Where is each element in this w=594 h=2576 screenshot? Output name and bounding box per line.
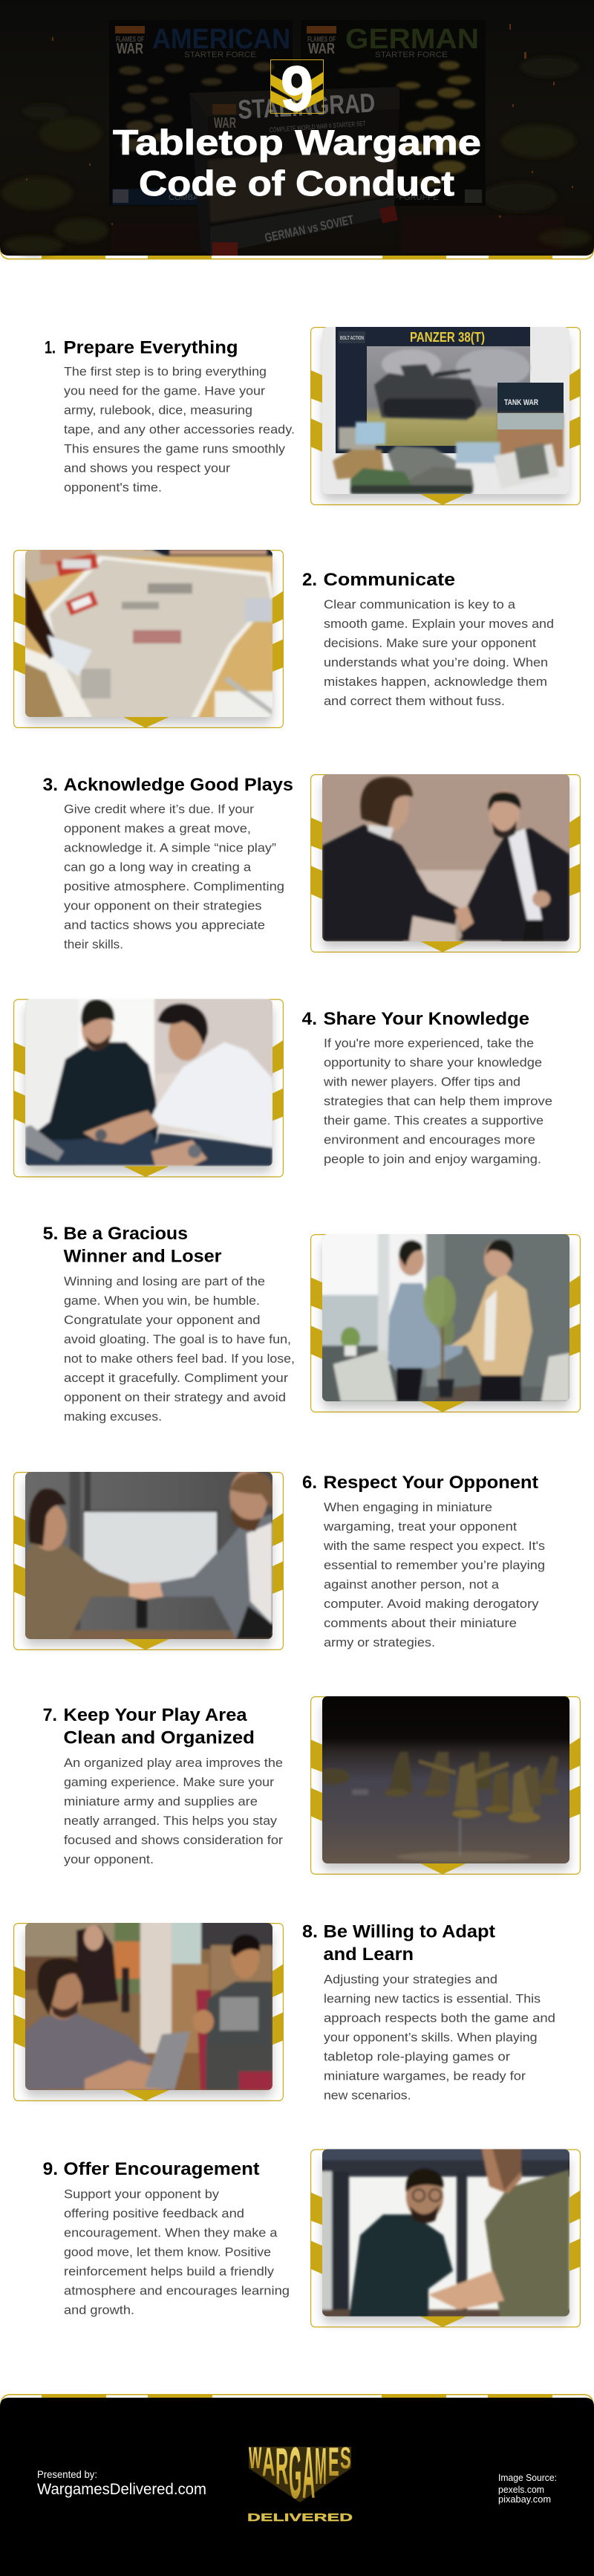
body text 5 [64, 1274, 295, 1424]
body text 6: army or strategies. [324, 1635, 435, 1649]
body text 4: strategies that can help them improve [324, 1094, 552, 1109]
photo: handshake in an office [319, 1230, 575, 1405]
image card 6 [13, 1468, 284, 1649]
panel: 4 share your knowledge [13, 996, 552, 1177]
body text 2: understands what you’re doing. When [324, 655, 548, 669]
panel: 3 acknowledge good plays [43, 774, 581, 953]
body text 7: miniature army and supplies are [64, 1794, 258, 1808]
header dark background [0, 0, 594, 256]
body text 3: their skills. [64, 938, 123, 952]
body text 1: opponent's time. [64, 481, 162, 495]
body text 7: gaming experience. Make sure your [64, 1775, 274, 1789]
German starter force box: GERMAN [345, 24, 479, 55]
heading 7: 7. [43, 1705, 57, 1725]
American starter force box: WAR [117, 41, 143, 57]
photo: friends chatting in a cafe [22, 1919, 275, 2094]
body text 4: opportunity to share your knowledge [324, 1056, 542, 1070]
body text 6: When engaging in miniature [324, 1500, 492, 1514]
logo: Wargames Delivered: M [315, 2437, 327, 2495]
body text 1: and shows you respect your [64, 461, 230, 476]
logo: Wargames Delivered: R [275, 2438, 288, 2496]
photo: businessmen shaking hands [322, 774, 569, 944]
body text 7: An organized play area improves the [64, 1756, 283, 1770]
body text 2: mistakes happen, acknowledge them [324, 675, 547, 689]
body text 6: with the same respect you expect. It's [323, 1539, 545, 1553]
body text 5: avoid gloating. The goal is to have fun, [64, 1332, 291, 1346]
body text 3: Give credit where it’s due. If your [64, 802, 254, 817]
hero background tanks and sparks [1, 24, 591, 254]
body text 3: positive atmosphere. Complimenting [64, 880, 284, 894]
image card 5 [310, 1230, 581, 1412]
body text 9: encouragement. When they make a [64, 2225, 278, 2239]
logo: Wargames Delivered: A [262, 2439, 275, 2485]
header banner [0, 0, 594, 259]
panel: 1 prepare everything [45, 327, 581, 505]
body text 9: offering positive feedback and [64, 2206, 244, 2220]
photo: Panzer 38(T) box set: BOLT ACTION [340, 336, 364, 341]
body text 5: not to make others feel bad. If you lose, [64, 1352, 295, 1366]
image card 8 [13, 1919, 284, 2101]
photo: man shaking hands by a window [319, 2146, 575, 2320]
logo: Wargames Delivered: DELIVERED [247, 2511, 353, 2524]
heading 8: Be Willing to Adapt [324, 1921, 495, 1942]
body text 2: Clear communication is key to a [324, 597, 516, 611]
body text 3: can go a long way in creating a [64, 860, 252, 875]
body text 8: your opponent’s skills. When playing [324, 2031, 538, 2045]
body text 3 [64, 802, 284, 952]
heading 6: Respect Your Opponent [324, 1473, 538, 1493]
heading 7: Clean and Organized [64, 1728, 255, 1748]
heading 8 [302, 1921, 495, 1965]
German starter force box: WAR [308, 41, 335, 57]
body text 2: and correct them without fuss. [324, 694, 505, 708]
image card 7 [310, 1696, 581, 1874]
heading 1: Prepare Everything [64, 337, 238, 358]
body text 3: and tactics shows you appreciate [64, 918, 265, 932]
body text 8: tabletop role-playing games or [324, 2050, 510, 2064]
heading 7: Keep Your Play Area [64, 1705, 247, 1725]
body text 4 [323, 1036, 552, 1167]
logo: Wargames Delivered: G [289, 2433, 301, 2514]
body text 6: against another person, not a [324, 1577, 500, 1592]
heading 2: Communicate [324, 570, 455, 590]
heading 6: 6. [302, 1473, 317, 1493]
body text 4: people to join and enjoy wargaming. [324, 1152, 541, 1167]
logo: Wargames Delivered: E [328, 2439, 339, 2485]
photo: two men with a tablet [25, 996, 277, 1169]
heading 1: 1. [45, 337, 56, 358]
body text 6 [323, 1500, 545, 1649]
body text 5: making excuses. [64, 1409, 162, 1424]
image source: pixabay.com [498, 2494, 551, 2505]
body text 1: you need for the game. Have your [64, 384, 265, 398]
heading 5: Be a Gracious [64, 1224, 188, 1244]
body text 6: wargaming, treat your opponent [323, 1519, 517, 1534]
image card 2 [13, 546, 284, 728]
panel: 6 respect your opponent [13, 1468, 545, 1649]
logo: Wargames Delivered: S [340, 2441, 351, 2475]
body text 9: atmosphere and encourages learning [64, 2283, 290, 2297]
body text 8: new scenarios. [324, 2089, 411, 2103]
body text 7: your opponent. [64, 1852, 154, 1866]
logo: Wargames Delivered [247, 2433, 353, 2524]
Stalingrad starter set box: GERMAN vs SOVIET [264, 212, 356, 245]
German starter force box: STARTER FORCE [375, 51, 448, 59]
body text 6: essential to remember you’re playing [324, 1558, 545, 1572]
image card 1 [310, 327, 581, 505]
body text 6: comments about their miniature [324, 1616, 517, 1630]
body text 3: acknowledge it. A simple “nice play” [64, 841, 276, 855]
body text 4: environment and encourages more [324, 1133, 535, 1147]
image card 3 [310, 774, 581, 953]
body text 8: learning new tactics is essential. This [324, 1992, 541, 2006]
body text 8: approach respects both the game and [324, 2011, 555, 2025]
heading 5: 5. [43, 1224, 58, 1244]
panel: 7 keep play area clean [43, 1696, 581, 1874]
image card 9 [310, 2146, 581, 2327]
American starter force box: STARTER FORCE [184, 51, 256, 59]
body text 9: good move, let them know. Positive [64, 2245, 271, 2259]
body text 9: and growth. [64, 2303, 134, 2317]
photo: miniature soldiers on a table [317, 1696, 569, 1863]
badge: number 9: 9 [281, 53, 313, 123]
body text 9: reinforcement helps build a friendly [64, 2264, 275, 2278]
panel: 2 communicate [13, 546, 554, 728]
American starter force box: AMERICAN [152, 24, 290, 55]
American starter force box: FLAMES OF [116, 36, 144, 44]
body text 2: smooth game. Explain your moves and [324, 617, 554, 631]
logo: Wargames Delivered: W [249, 2441, 261, 2475]
heading 4: Share Your Knowledge [324, 1009, 529, 1029]
body text 4: their game. This creates a supportive [324, 1114, 544, 1128]
body text 9 [64, 2187, 290, 2317]
body text 7 [64, 1756, 283, 1866]
American starter force box [109, 20, 293, 206]
photo: Panzer 38(T) box set: TANK WAR [504, 398, 538, 407]
header gold trim [1, 249, 593, 259]
body text 7: neatly arranged. This helps you stay [64, 1814, 278, 1828]
photo: Panzer 38(T) box set: PANZER 38(T) [410, 330, 485, 345]
footer [0, 2394, 594, 2576]
German starter force box: PFGRUPPE [394, 193, 439, 202]
body text 2: decisions. Make sure your opponent [324, 636, 536, 650]
title: Code of Conduct [139, 163, 454, 203]
panel: 5 gracious winner and loser [43, 1224, 581, 1424]
photo: map on a table [22, 546, 278, 724]
body text 9: Support your opponent by [64, 2187, 220, 2201]
body text 5: opponent on their strategy and avoid [64, 1390, 286, 1404]
body text 7: focused and shows consideration for [64, 1833, 283, 1847]
heading 8: and Learn [324, 1944, 414, 1965]
heading 5 [43, 1224, 221, 1266]
Stalingrad starter set box [189, 87, 399, 256]
footer gold trim [1, 2394, 593, 2407]
body text 5: Winning and losing are part of the [64, 1274, 265, 1288]
body text 1: army, rulebook, dice, measuring [64, 403, 252, 418]
German starter force box: FLAMES OF [307, 36, 336, 44]
photo: Panzer 38(T) box set [322, 327, 569, 494]
body text 1: The first step is to bring everything [64, 365, 267, 379]
body text 1: This ensures the game runs smoothly [64, 442, 286, 456]
body text 2 [324, 597, 554, 708]
Stalingrad starter set box: WAR [214, 115, 236, 132]
Stalingrad starter set box: STALINGRAD [237, 87, 376, 125]
heading 4: 4. [302, 1009, 317, 1029]
image source: Image Source: [498, 2472, 557, 2483]
image source: pexels.com [498, 2484, 544, 2495]
body text 8: Adjusting your strategies and [324, 1973, 497, 1987]
body text 1 [64, 365, 295, 495]
body text 1: tape, and any other accessories ready. [64, 423, 295, 437]
presented by: WargamesDelivered.com [37, 2481, 206, 2498]
title: Tabletop Wargame [113, 123, 481, 162]
footer black background [0, 2398, 594, 2576]
German starter force box [301, 20, 486, 206]
heading 8: 8. [302, 1921, 318, 1942]
body text 5: game. When you win, be humble. [64, 1294, 260, 1308]
panel: 8 be willing to adapt [13, 1919, 555, 2103]
title [113, 123, 481, 203]
presented by [37, 2469, 206, 2498]
body text 5: Congratulate your opponent and [64, 1313, 260, 1327]
American starter force box: COMBAT [169, 193, 203, 202]
body text 6: computer. Avoid making derogatory [324, 1597, 539, 1611]
heading 9: 9. [43, 2159, 58, 2179]
body text 3: your opponent on their strategies [64, 899, 261, 913]
badge: number 9 [270, 53, 324, 123]
body text 5: accept it gracefully. Compliment your [64, 1371, 288, 1385]
heading 3: Acknowledge Good Plays [64, 775, 293, 795]
body text 8 [324, 1973, 555, 2103]
Stalingrad starter set box: COMPLETE WORLD WAR II STARTER SET [269, 120, 366, 134]
presented by: Presented by: [37, 2469, 97, 2480]
panel: 9 offer encouragement [43, 2146, 581, 2327]
body text 8: miniature wargames, be ready for [324, 2069, 526, 2083]
heading 7 [43, 1705, 255, 1748]
photo: handshake in front of whiteboard [22, 1468, 278, 1643]
heading 3: 3. [43, 775, 58, 795]
image source [498, 2472, 557, 2505]
heading 9: Offer Encouragement [64, 2159, 260, 2179]
image card 4 [13, 996, 284, 1177]
logo: Wargames Delivered: A [302, 2433, 315, 2514]
body text 4: If you're more experienced, take the [324, 1036, 534, 1051]
body text 4: with newer players. Offer tips and [323, 1075, 520, 1089]
heading 2: 2. [302, 570, 317, 590]
heading 5: Winner and Loser [64, 1247, 221, 1266]
body text 3: opponent makes a great move, [64, 822, 251, 836]
